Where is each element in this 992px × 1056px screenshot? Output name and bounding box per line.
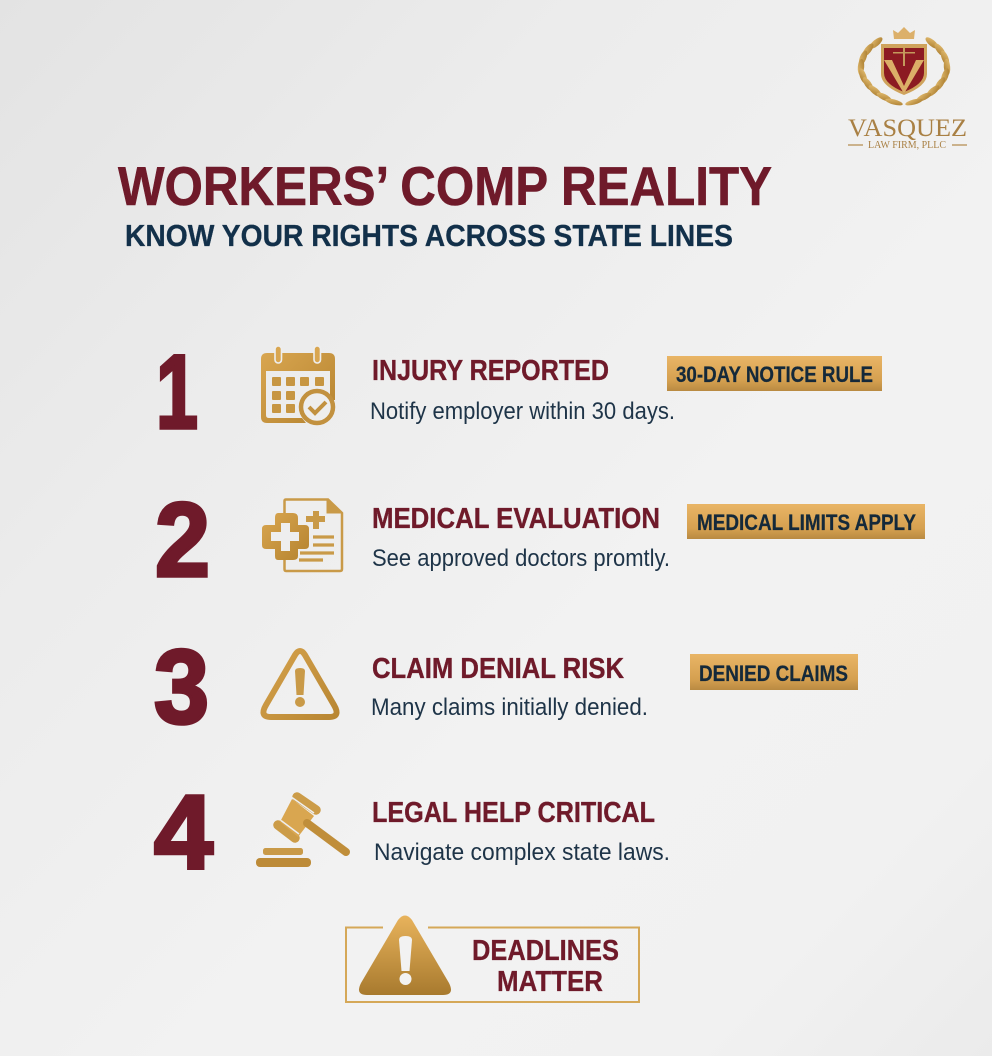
callout text: DEADLINES <box>472 935 619 967</box>
heading: INJURY REPORTED <box>372 355 609 387</box>
number 2: 2 <box>155 482 210 599</box>
number 3: 3 <box>154 629 209 746</box>
logo wordmark: VASQUEZ <box>848 115 967 142</box>
icon: warning triangle, filled <box>359 916 451 995</box>
step 3: claim denial risk <box>154 629 858 746</box>
heading: CLAIM DENIAL RISK <box>372 653 624 685</box>
step 2: medical evaluation <box>155 482 925 599</box>
icon: gavel <box>256 797 346 867</box>
icon: crown <box>893 27 915 39</box>
description: See approved doctors promtly. <box>372 545 670 572</box>
step 1: injury reported <box>156 334 882 451</box>
badge: 30-day notice rule <box>667 356 882 391</box>
logo: Vasquez Law Firm <box>848 27 967 151</box>
badge: denied claims: DENIED CLAIMS <box>699 661 848 686</box>
badge: 30-day notice rule: 30-DAY NOTICE RULE <box>676 362 873 387</box>
icon: shield <box>881 44 927 95</box>
number 4: 4 <box>154 774 213 891</box>
description: Notify employer within 30 days. <box>370 398 675 425</box>
icon: warning triangle <box>263 651 337 717</box>
subtitle: KNOW YOUR RIGHTS ACROSS STATE LINES <box>125 218 733 253</box>
icon: calendar with check <box>261 346 335 423</box>
badge: medical limits apply: MEDICAL LIMITS APPLY <box>697 510 916 535</box>
description: Navigate complex state laws. <box>374 839 670 866</box>
number 1: 1 <box>156 334 198 451</box>
badge: denied claims <box>690 654 858 690</box>
heading: LEGAL HELP CRITICAL <box>372 797 655 829</box>
callout: deadlines matter: MATTER <box>497 966 603 998</box>
icon: laurel wreath <box>857 35 951 107</box>
step 4: legal help critical <box>154 774 670 891</box>
badge: medical limits apply <box>687 504 925 539</box>
logo tagline: LAW FIRM, PLLC <box>868 140 946 151</box>
callout: deadlines matter <box>346 916 639 1002</box>
icon: medical document <box>262 499 342 571</box>
description: Many claims initially denied. <box>371 694 648 721</box>
title: WORKERS’ COMP REALITY <box>118 155 772 217</box>
heading: MEDICAL EVALUATION <box>372 503 660 535</box>
